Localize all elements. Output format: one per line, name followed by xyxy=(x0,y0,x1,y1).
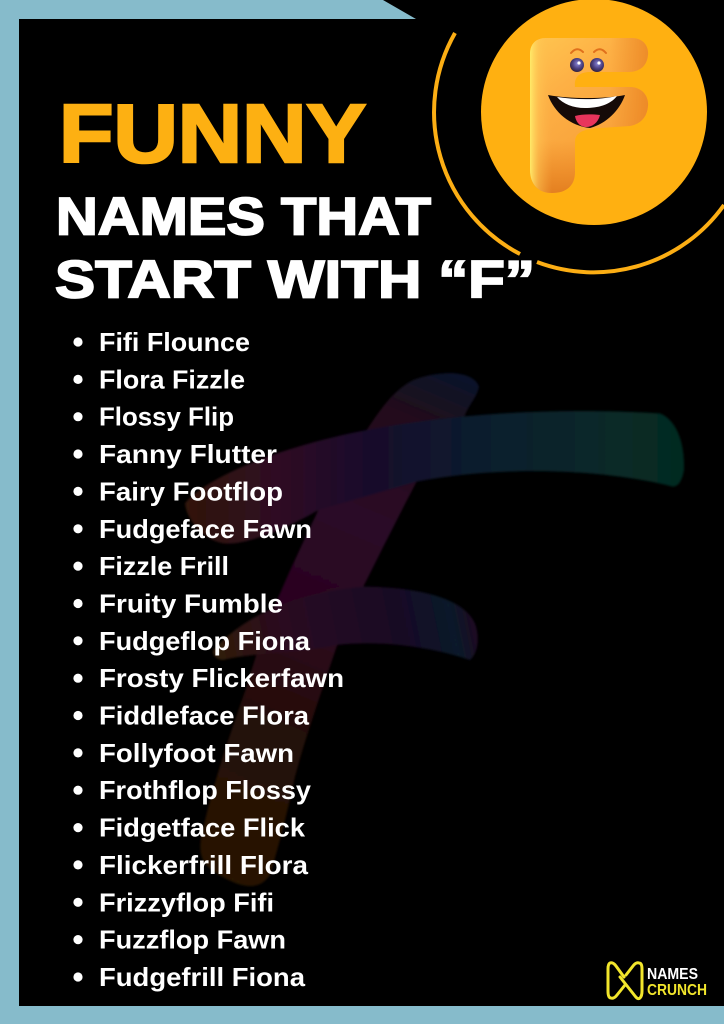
bullet list of names: Fanny Flutter xyxy=(99,439,277,469)
heading: start with F: START WITH “F” xyxy=(55,250,535,310)
logo: Names Crunch: NAMES xyxy=(647,966,698,983)
logo: Names Crunch xyxy=(608,963,707,999)
icon: N loop mark xyxy=(608,963,642,999)
bullet list of names: Fairy Footflop xyxy=(99,476,283,506)
bullet list of names: Flora Fizzle xyxy=(99,364,245,394)
title xyxy=(55,87,535,310)
tongue xyxy=(575,114,600,127)
bullet list of names: Fudgeflop Fiona xyxy=(99,626,311,656)
background brush letter F xyxy=(185,373,684,886)
heading: FUNNY: FUNNY xyxy=(59,87,366,180)
bullet list of names: Flickerfrill Flora xyxy=(99,850,309,880)
bullet list of names: Flossy Flip xyxy=(99,402,234,432)
bullet list of names: Fiddleface Flora xyxy=(99,700,310,730)
bullet list of names: Follyfoot Fawn xyxy=(99,738,294,768)
bullet list of names: Fidgetface Flick xyxy=(99,813,306,843)
decorative yellow ring around badge xyxy=(434,33,724,272)
mouth xyxy=(548,95,625,128)
bullet list of names: Frothflop Flossy xyxy=(99,775,312,805)
logo: Names Crunch: CRUNCH xyxy=(647,982,707,999)
bullet list of names xyxy=(73,327,344,992)
bullet list of names: Fudgefrill Fiona xyxy=(99,962,306,992)
bullet list of names: Fuzzflop Fawn xyxy=(99,925,286,955)
bullet list of names: Fruity Fumble xyxy=(99,588,283,618)
eyebrows xyxy=(571,49,606,53)
heading: names that: NAMES THAT xyxy=(56,188,431,246)
icon: smiling letter F xyxy=(530,38,648,193)
bullet list of names: Fudgeface Fawn xyxy=(99,514,312,544)
bullet list of names: Frosty Flickerfawn xyxy=(99,663,344,693)
yellow badge circle xyxy=(481,0,707,225)
bullet list of names: Fizzle Frill xyxy=(99,551,229,581)
bullet list of names: Fifi Flounce xyxy=(99,327,250,357)
eyes xyxy=(570,58,584,72)
bullet list of names: Frizzyflop Fifi xyxy=(99,887,274,917)
